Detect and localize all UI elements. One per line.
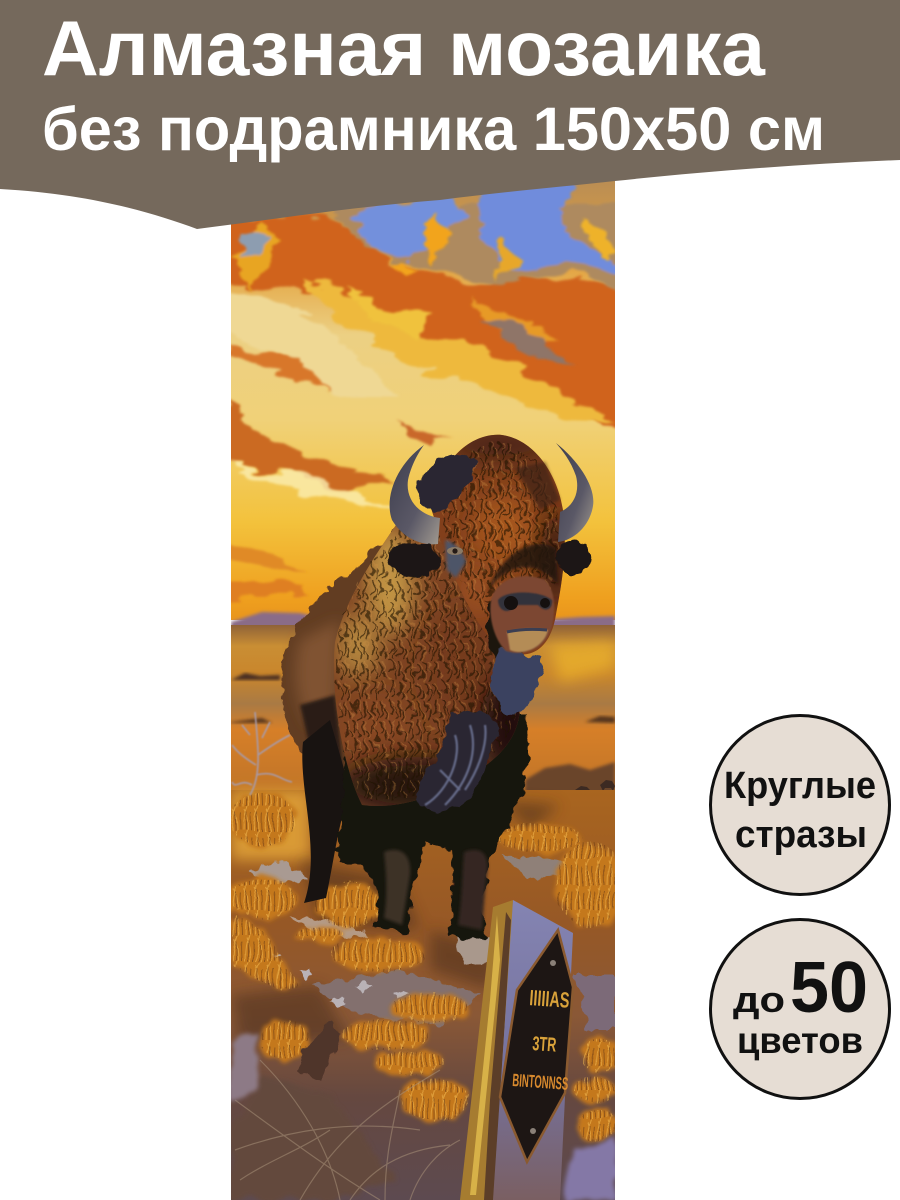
hill and shrubs right <box>524 760 615 790</box>
badge: up to 50 colours: 50 <box>790 948 868 1028</box>
eye <box>445 540 466 578</box>
badge: up to 50 colours <box>710 920 890 1098</box>
muzzle <box>490 576 554 653</box>
pale stones <box>245 855 615 1030</box>
rock foreground <box>231 1075 395 1200</box>
clouds: tan and blue upper sky <box>330 178 625 290</box>
sun glare on plain <box>550 642 615 682</box>
nostril right <box>540 598 550 608</box>
purple shadow lower right <box>565 1140 615 1200</box>
post side face <box>493 900 573 1200</box>
grass blade texture <box>228 792 624 1141</box>
ground and grass <box>228 790 624 1200</box>
left horn <box>390 445 440 544</box>
beard <box>493 648 542 716</box>
subtitle: без подрамника 150х50 см <box>42 95 825 163</box>
head fur texture <box>440 442 558 634</box>
header banner <box>0 0 900 229</box>
sign lettering: 3TR <box>532 1033 557 1057</box>
muzzle dark fringe <box>487 600 525 680</box>
signpost <box>460 900 573 1200</box>
lips <box>507 629 548 652</box>
sign bolts <box>550 960 556 966</box>
plains <box>231 625 615 800</box>
post front plank <box>460 900 513 1200</box>
grass tufts <box>228 792 624 1141</box>
sign lettering <box>512 985 570 1094</box>
head mane <box>431 434 565 654</box>
distant hills <box>231 610 615 625</box>
mantle fur texture <box>336 530 515 801</box>
distant bison silhouettes <box>575 780 615 790</box>
flank dark <box>298 694 344 768</box>
badge: up to 50 colours: цветов <box>737 1020 863 1061</box>
diamond sign <box>500 930 573 1162</box>
badge: round rhinestones: Круглые <box>724 765 876 807</box>
right ear <box>556 540 592 574</box>
bison <box>283 427 593 940</box>
sign lettering: BINTONNSS <box>512 1070 569 1094</box>
body underside and front legs <box>338 715 528 940</box>
clouds: orange sunset bands <box>225 212 625 600</box>
painting: bison at sunset <box>225 175 625 1200</box>
badge: round rhinestones <box>710 716 890 894</box>
rear body <box>280 528 394 770</box>
brow shadow <box>486 544 558 595</box>
title: Алмазная мозаика <box>42 4 766 92</box>
sunlit grass left <box>231 790 310 860</box>
purple shadow lower left <box>231 1030 258 1105</box>
dark shadow patches <box>231 800 560 1040</box>
distant trees left <box>231 673 280 680</box>
chest fur with blue highlights <box>415 711 500 812</box>
nostril left <box>504 596 518 610</box>
sky <box>225 175 625 620</box>
dry tree <box>232 712 292 795</box>
nose <box>498 592 552 611</box>
rump light <box>296 620 340 725</box>
dark shrub with seed pods <box>298 1020 340 1080</box>
hind leg <box>302 720 350 903</box>
distant tree line lower <box>231 716 615 723</box>
right horn <box>556 443 593 542</box>
badge: up to 50 colours: до <box>733 979 785 1020</box>
crown shadow <box>515 462 560 510</box>
left ear <box>388 543 440 577</box>
shoulder mantle <box>334 525 520 806</box>
sign lettering: IIIIIAS <box>529 985 570 1013</box>
dark forelock <box>416 455 475 512</box>
clouds: golden highlights <box>225 212 615 510</box>
lower leg highlights <box>384 850 410 925</box>
badge: round rhinestones: стразы <box>735 814 867 856</box>
dark dry brush foreground <box>235 1060 460 1200</box>
